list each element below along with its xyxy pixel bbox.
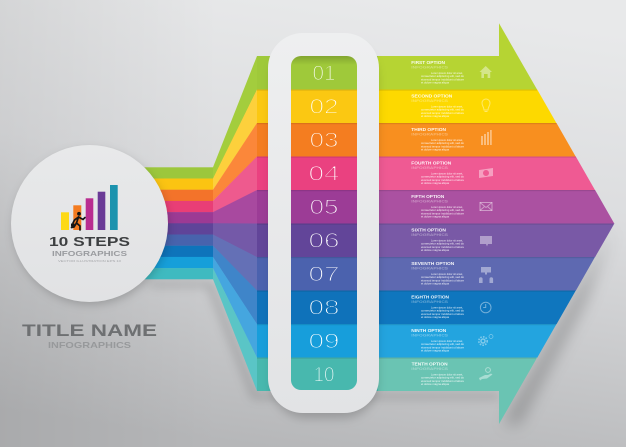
option 6 text: et dolore magna aliqua [421, 248, 449, 252]
icon: banknote [479, 168, 493, 178]
option 3 text: consectetur adipiscing elit, sed do [421, 141, 464, 145]
step numbers: 02 [310, 96, 338, 118]
option 4 text: et dolore magna aliqua [421, 181, 449, 185]
step numbers: 10 [314, 364, 334, 386]
option 6 text: consectetur adipiscing elit, sed do [421, 242, 464, 246]
option 7 text: INFOGRAPHICS [411, 266, 449, 270]
option 2 text: et dolore magna aliqua [421, 114, 449, 118]
option 1 text: Lorem ipsum dolor sit amet, [431, 71, 463, 75]
option 5 text [411, 194, 464, 219]
option 9 text: INFOGRAPHICS [411, 334, 449, 338]
row separators [257, 90, 613, 359]
badge subheading: INFOGRAPHICS [52, 249, 127, 258]
option 8 text: INFOGRAPHICS [411, 300, 449, 304]
badge small print: VECTOR ILLUSTRATION EPS 10 [58, 259, 122, 263]
option 2 text [411, 93, 464, 118]
option 1 text: consectetur adipiscing elit, sed do [421, 74, 464, 78]
option 4 text: eiusmod tempor incididunt ut labore [421, 178, 464, 182]
arrow head stripes [378, 23, 614, 424]
option 9 text: NINTH OPTION [411, 328, 446, 333]
option 9 text [411, 328, 464, 353]
option 10 text [411, 361, 464, 386]
option 6 text: eiusmod tempor incididunt ut labore [421, 245, 464, 249]
option 4 text: INFOGRAPHICS [411, 166, 449, 170]
option 3 text: INFOGRAPHICS [411, 132, 449, 136]
arrow drop shadow [150, 228, 612, 424]
step numbers: 03 [310, 129, 338, 152]
step numbers: 09 [308, 330, 340, 353]
option 5 text: Lorem ipsum dolor sit amet, [431, 205, 463, 209]
step numbers: 04 [308, 162, 340, 186]
option 7 text: consectetur adipiscing elit, sed do [421, 275, 464, 279]
circle badge shadow [14, 150, 168, 304]
option 2 text: SECOND OPTION [411, 93, 452, 98]
step numbers: 06 [308, 230, 340, 252]
icon: home [480, 66, 492, 78]
option 6 text: SIXTH OPTION [411, 227, 446, 232]
angled stripes [213, 56, 257, 391]
central window shading [291, 56, 357, 65]
option 8 text: Lorem ipsum dolor sit amet, [431, 305, 463, 309]
option 1 text [411, 60, 464, 85]
option 4 text: consectetur adipiscing elit, sed do [421, 175, 464, 179]
left flat stripes [140, 167, 213, 279]
icon: envelope [480, 202, 492, 210]
option 3 text: THIRD OPTION [411, 127, 446, 132]
option 8 text: eiusmod tempor incididunt ut labore [421, 312, 464, 316]
option 8 text: consectetur adipiscing elit, sed do [421, 309, 464, 313]
option 3 text: et dolore magna aliqua [421, 148, 449, 152]
option 8 text: EIGHTH OPTION [411, 294, 449, 299]
option 7 text: SEVENTH OPTION [411, 261, 454, 266]
option 7 text: Lorem ipsum dolor sit amet, [431, 272, 463, 276]
option 1 text: FIRST OPTION [411, 60, 445, 65]
arrow: converging stripes [140, 23, 614, 424]
step numbers: 05 [310, 196, 338, 219]
option 9 text: et dolore magna aliqua [421, 349, 449, 353]
option 2 text: eiusmod tempor incididunt ut labore [421, 111, 464, 115]
option 5 text: FIFTH OPTION [411, 194, 444, 199]
bar chart logo [61, 185, 118, 230]
icon: gears [479, 334, 493, 345]
option 1 text: INFOGRAPHICS [411, 66, 449, 70]
option 6 text: INFOGRAPHICS [411, 233, 449, 237]
icon: clock [480, 302, 491, 313]
option 9 text: eiusmod tempor incididunt ut labore [421, 345, 464, 349]
option 5 text: eiusmod tempor incididunt ut labore [421, 211, 464, 215]
option 8 text [411, 294, 464, 319]
icon: running businessman [71, 212, 85, 230]
subtitle: INFOGRAPHICS [48, 340, 132, 350]
option 3 text [411, 127, 464, 152]
option 4 text: Lorem ipsum dolor sit amet, [431, 171, 463, 175]
option 9 text: Lorem ipsum dolor sit amet, [431, 339, 463, 343]
badge heading: 10 STEPS [49, 235, 130, 249]
circle badge [11, 145, 168, 302]
icon: bar chart [481, 130, 492, 145]
option 5 text: INFOGRAPHICS [411, 200, 449, 204]
step numbers [308, 62, 340, 386]
icon: people hierarchy [479, 267, 493, 283]
option 10 text: consectetur adipiscing elit, sed do [421, 376, 464, 380]
option 7 text: et dolore magna aliqua [421, 282, 449, 286]
step numbers: 08 [308, 296, 340, 320]
option 1 text: et dolore magna aliqua [421, 81, 449, 85]
step numbers: 07 [308, 263, 340, 286]
option 7 text: eiusmod tempor incididunt ut labore [421, 278, 464, 282]
option 6 text: Lorem ipsum dolor sit amet, [431, 238, 463, 242]
icon: light bulb [482, 99, 490, 112]
option 8 text: et dolore magna aliqua [421, 315, 449, 319]
option 3 text: Lorem ipsum dolor sit amet, [431, 138, 463, 142]
option 3 text: eiusmod tempor incididunt ut labore [421, 144, 464, 148]
option 9 text: consectetur adipiscing elit, sed do [421, 342, 464, 346]
option 10 text: et dolore magna aliqua [421, 382, 449, 386]
option 2 text: consectetur adipiscing elit, sed do [421, 108, 464, 112]
title: TITLE NAME [22, 322, 157, 340]
option 10 text: INFOGRAPHICS [411, 367, 449, 371]
option 2 text: Lorem ipsum dolor sit amet, [431, 104, 463, 108]
central stripes under the pill [257, 56, 380, 391]
icon: hand with coin [479, 368, 492, 380]
option 10 text: eiusmod tempor incididunt ut labore [421, 379, 464, 383]
option 7 text [411, 261, 464, 286]
pill frame shadow [272, 44, 377, 418]
option 10 text: TENTH OPTION [412, 361, 448, 366]
option 4 text: FOURTH OPTION [411, 160, 451, 165]
option 2 text: INFOGRAPHICS [411, 99, 449, 103]
icon: speech bubble [480, 236, 492, 246]
option 5 text: consectetur adipiscing elit, sed do [421, 208, 464, 212]
option 6 text [411, 227, 464, 252]
option 4 text [411, 160, 464, 185]
option 1 text: eiusmod tempor incididunt ut labore [421, 77, 464, 81]
option 5 text: et dolore magna aliqua [421, 215, 449, 219]
pill frame [268, 33, 379, 413]
option 10 text: Lorem ipsum dolor sit amet, [431, 372, 463, 376]
step numbers: 01 [312, 62, 336, 85]
